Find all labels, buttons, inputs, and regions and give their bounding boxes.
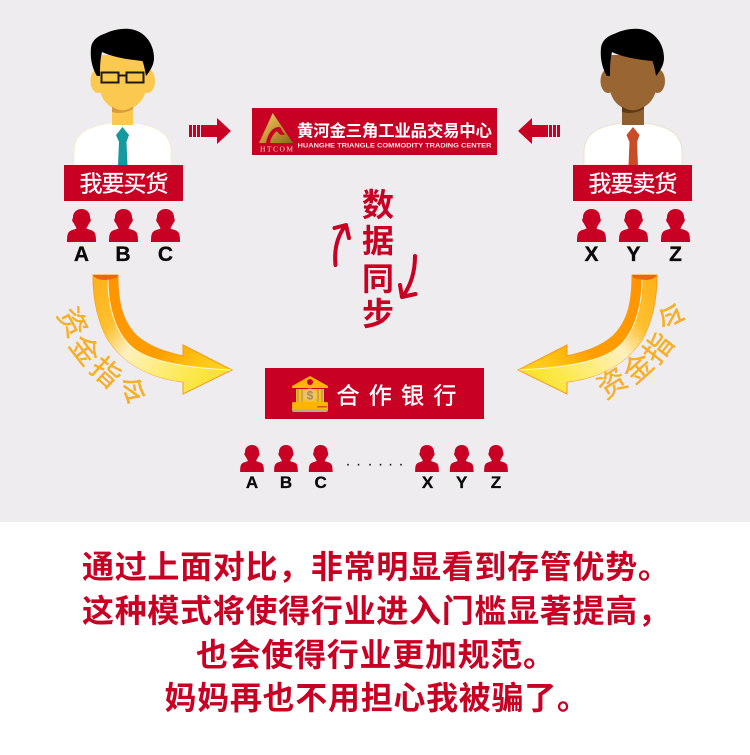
banner: buyer: 我要买货 [80, 164, 168, 198]
logo: exchange center: 黄河金三角工业品交易中心 [297, 118, 492, 142]
banner: seller [573, 164, 692, 201]
banner: partner bank [265, 368, 484, 419]
logo: exchange center [252, 108, 497, 155]
arrow: sync up [334, 225, 349, 265]
banner: partner bank: 合作银行 [336, 376, 466, 410]
white caption panel [0, 522, 750, 755]
logo: exchange center: HUANGHE TRIANGLE COMMODITY TRADING CENTER [298, 142, 492, 150]
seller figure [584, 29, 682, 165]
label: left funds instruction: 令 [109, 364, 157, 415]
icon: teal tie [116, 127, 129, 165]
arrow: buyer funds instruction [93, 275, 232, 394]
arrow: seller to exchange [518, 118, 560, 144]
label: right funds instruction: 资 [588, 356, 635, 407]
seller accounts X Y Z: Z [669, 243, 682, 266]
heading: data sync: 据 [362, 216, 394, 262]
caption text: 通过上面对比，非常明显看到存管优势。 [82, 542, 671, 588]
caption text: 这种模式将使得行业进入门槛显著提高， [82, 586, 671, 632]
arrow: sync down [400, 256, 416, 297]
icon: gold triangle [259, 113, 293, 143]
bank accounts A B C X Y Z: B [280, 473, 292, 492]
heading: data sync: 步 [362, 289, 394, 335]
bank accounts A B C X Y Z: ...... [346, 456, 403, 468]
buyer accounts A B C: C [158, 243, 173, 266]
label: right funds instruction: 金 [612, 342, 662, 392]
arrow: seller funds instruction [518, 275, 657, 394]
background panel [0, 0, 750, 522]
caption text: 妈妈再也不用担心我被骗了。 [164, 673, 590, 719]
label: right funds instruction [588, 294, 696, 407]
heading: data sync [362, 180, 394, 335]
bank accounts A B C X Y Z [240, 445, 508, 492]
buyer accounts A B C: B [115, 243, 131, 266]
bank accounts A B C X Y Z: Z [491, 473, 501, 492]
seller accounts X Y Z: Y [626, 243, 641, 266]
buyer accounts A B C [67, 209, 180, 266]
arrow: buyer to exchange [189, 118, 231, 144]
buyer figure [74, 29, 171, 165]
label: left funds instruction: 金 [61, 325, 112, 373]
label: left funds instruction [49, 299, 157, 415]
bank accounts A B C X Y Z: Y [456, 473, 468, 492]
icon: bank: $ [307, 388, 314, 402]
logo: exchange center: HTCOM [260, 144, 293, 154]
bank accounts A B C X Y Z: X [422, 473, 434, 492]
icon: orange tie [626, 127, 640, 165]
label: right funds instruction: 令 [645, 294, 696, 339]
icon: bank [292, 376, 328, 412]
label: left funds instruction: 资 [49, 299, 100, 344]
seller accounts X Y Z: X [584, 243, 599, 266]
label: right funds instruction: 指 [631, 323, 682, 371]
label: left funds instruction: 指 [82, 346, 132, 396]
banner: seller: 我要卖货 [588, 164, 678, 198]
heading: data sync: 数 [362, 180, 394, 226]
bank accounts A B C X Y Z: A [246, 473, 258, 492]
seller accounts X Y Z [577, 209, 690, 266]
caption text: 也会使得行业更加规范。 [196, 630, 556, 676]
heading: data sync: 同 [362, 254, 394, 300]
banner: buyer [64, 164, 183, 201]
icon: glasses [102, 72, 144, 82]
buyer accounts A B C: A [74, 243, 89, 266]
caption text [82, 542, 671, 719]
bank accounts A B C X Y Z: C [315, 473, 327, 492]
